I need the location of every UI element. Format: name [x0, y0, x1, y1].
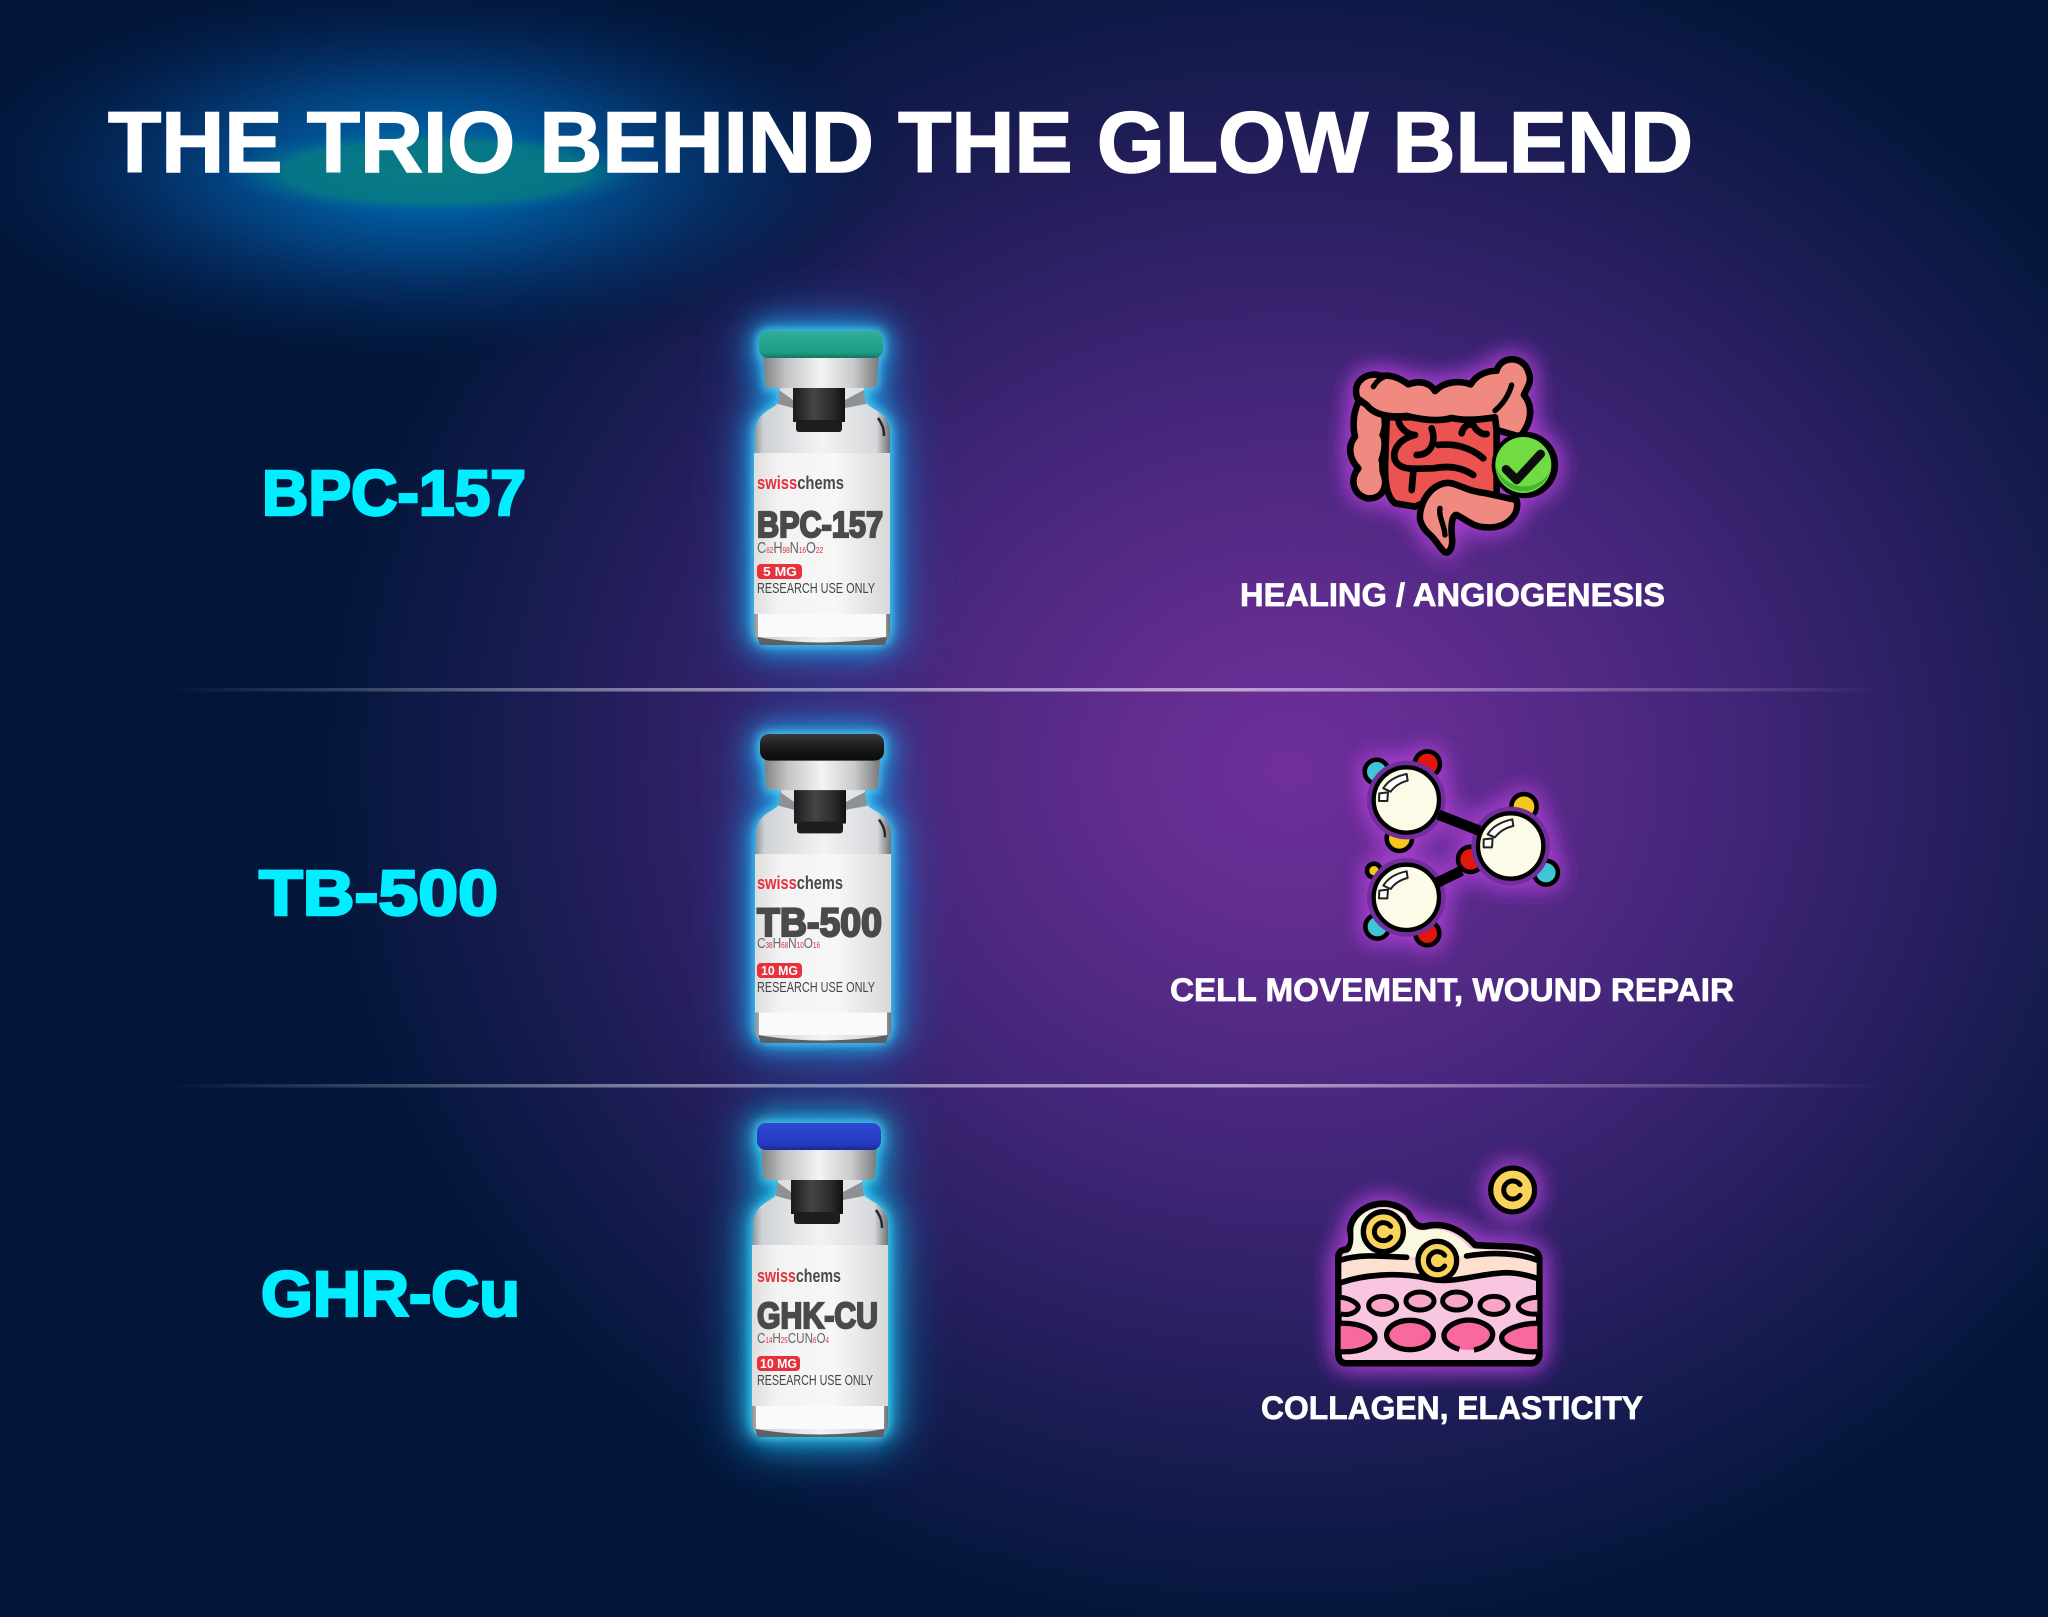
row 3 vial: GHK-CU: GHK-CU: [757, 1295, 878, 1336]
row 2 vial: TB-500: swisschems: [757, 873, 843, 893]
row 3 icon: skin layers with collagen: [1338, 1168, 1539, 1363]
row 2 vial: TB-500: [755, 734, 891, 1043]
cell row 2: [1341, 1320, 1537, 1352]
row 1 vial: BPC-157: swisschems: [757, 473, 844, 493]
vial glow: [752, 1123, 888, 1437]
row 2 name: TB-500: TB-500: [259, 857, 498, 929]
vial glow: [755, 734, 891, 1043]
row 3 vial: GHK-CU: RESEARCH USE ONLY: [757, 1373, 873, 1389]
gaps around spheres: [1367, 761, 1550, 937]
row 1 vial: BPC-157: [754, 331, 890, 645]
title: THE TRIO BEHIND THE GLOW BLEND: [108, 95, 1693, 191]
row 1 vial: BPC-157: C62H98N16O22: [757, 540, 823, 557]
row 1 vial: BPC-157: BPC-157: [757, 504, 883, 545]
row 1 benefit label: HEALING / ANGIOGENESIS: [1240, 577, 1665, 613]
small intestine: [1385, 417, 1497, 507]
row 3 vial: GHK-CU: swisschems: [757, 1266, 841, 1286]
row 2 vial: TB-500: 10 MG: [761, 963, 798, 978]
row 3 vial: GHK-CU: [752, 1123, 888, 1437]
row 3 vial: GHK-CU: 10 MG: [760, 1356, 797, 1371]
spheres: [1374, 767, 1439, 833]
row 3 benefit label: COLLAGEN, ELASTICITY: [1261, 1390, 1643, 1426]
highlights: [1379, 774, 1408, 801]
row 3 name: GHR-Cu: GHR-Cu: [261, 1258, 520, 1330]
satellite blobs: [1365, 751, 1558, 945]
colon: [1350, 402, 1385, 498]
bonds: [1437, 815, 1479, 883]
row 3 vial: GHK-CU: C14H25CUN6O4: [757, 1330, 829, 1347]
check badge: [1492, 432, 1558, 498]
row 1 vial: BPC-157: 5 MG: [763, 564, 797, 579]
skin block: [1338, 1204, 1539, 1363]
row 1 icon: intestines with check: [1350, 359, 1558, 553]
row 2 vial: TB-500: RESEARCH USE ONLY: [757, 980, 875, 996]
vial glow: [754, 331, 890, 645]
row 2 vial: TB-500: C38H68N10O16: [757, 935, 820, 952]
row 1 vial: BPC-157: RESEARCH USE ONLY: [757, 581, 875, 597]
collagen coins: [1363, 1212, 1403, 1252]
cell row 1: [1341, 1292, 1537, 1314]
divider 2: [170, 1084, 1880, 1088]
row 2 icon: molecule: [1365, 751, 1558, 945]
divider 1: [170, 688, 1880, 692]
row 1 name: BPC-157: BPC-157: [262, 457, 526, 529]
row 2 vial: TB-500: TB-500: [757, 901, 882, 945]
row 2 benefit label: CELL MOVEMENT, WOUND REPAIR: [1170, 972, 1734, 1008]
